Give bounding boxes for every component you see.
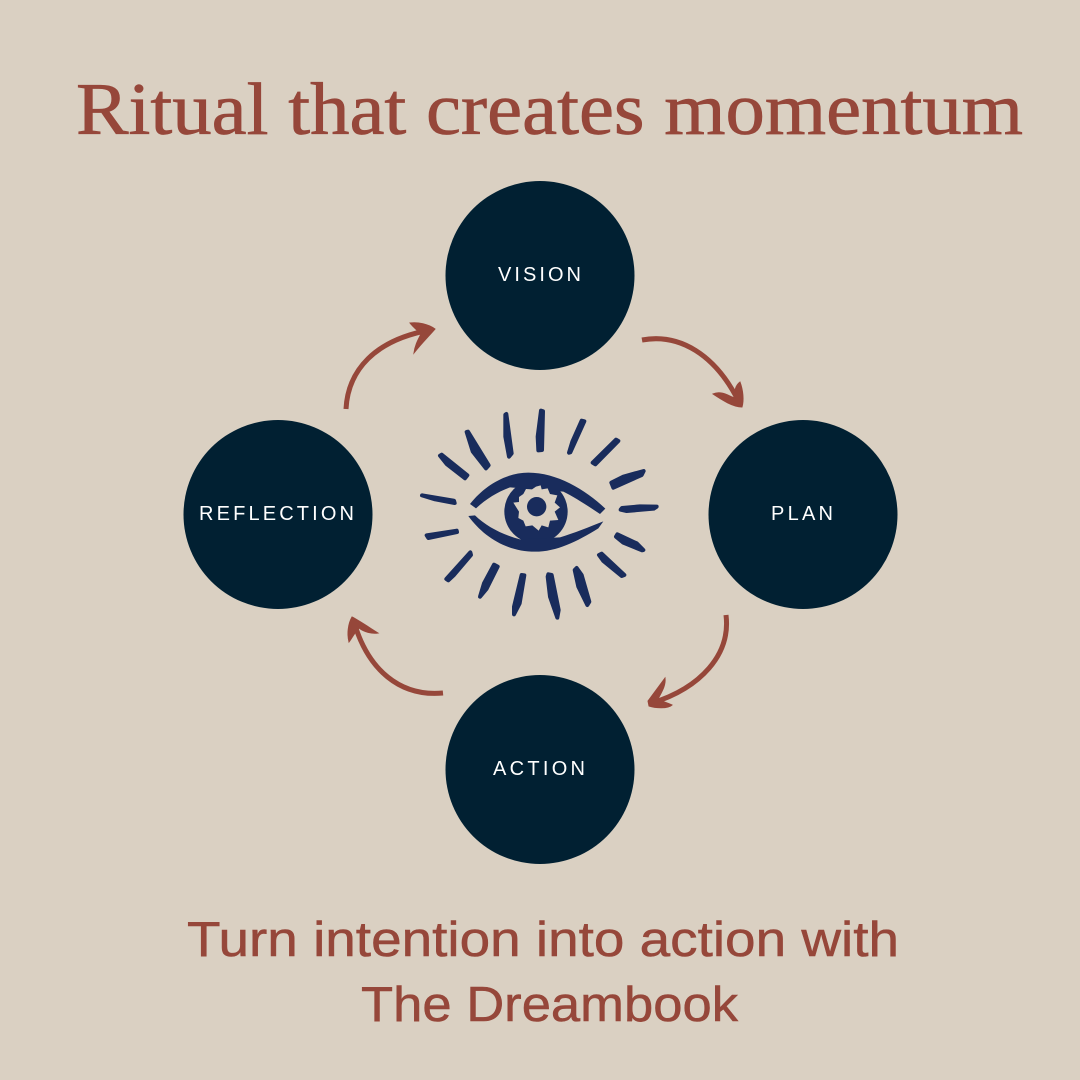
title: Ritual that creates momentum bbox=[76, 69, 1023, 151]
closing line bbox=[187, 913, 899, 1032]
cycle node: vision: VISION bbox=[498, 264, 581, 286]
arrow: vision to plan bbox=[642, 339, 743, 407]
cycle node: reflection bbox=[184, 420, 372, 609]
cycle node: plan bbox=[708, 420, 898, 609]
arrow: plan to action bbox=[648, 615, 727, 708]
closing line: Turn intention into action with bbox=[187, 913, 899, 967]
cycle node: plan: PLAN bbox=[771, 503, 833, 525]
arrow: action to reflection bbox=[348, 617, 443, 693]
cycle node: reflection: REFLECTION bbox=[199, 503, 354, 525]
closing line: The Dreambook bbox=[361, 978, 739, 1032]
cycle node: action: ACTION bbox=[493, 758, 585, 780]
cycle node: vision bbox=[446, 181, 634, 370]
icon: eye with rays bbox=[422, 411, 657, 618]
arrow: reflection to vision bbox=[346, 323, 435, 409]
cycle node: action bbox=[446, 675, 634, 864]
